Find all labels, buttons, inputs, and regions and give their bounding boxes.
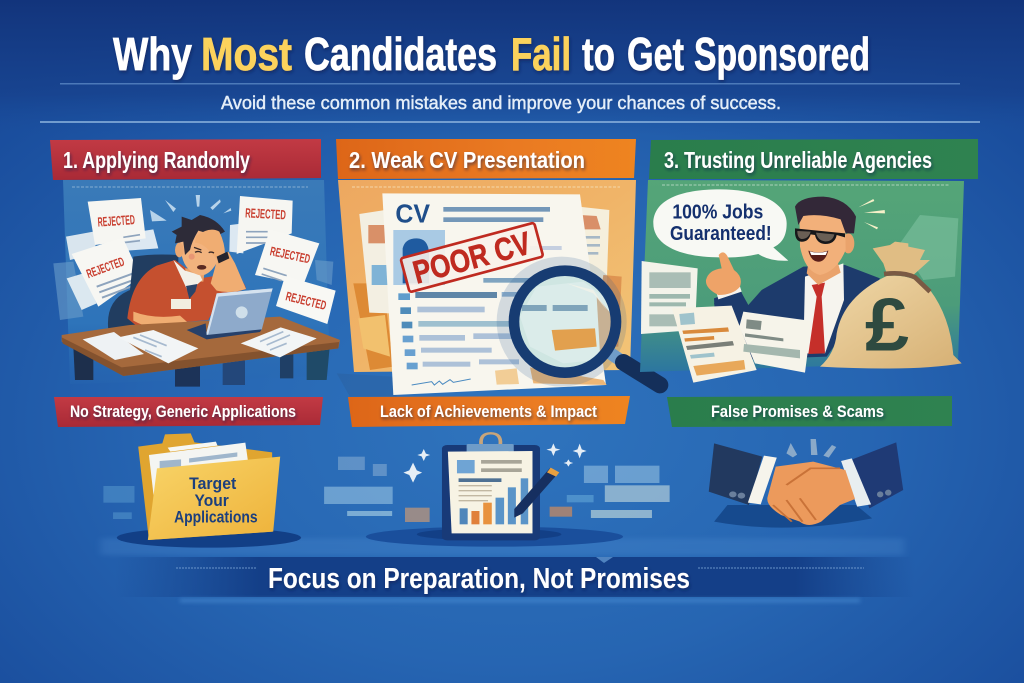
stress marks	[150, 195, 231, 221]
sweater	[127, 260, 246, 326]
desk	[62, 317, 340, 387]
neck	[185, 268, 205, 282]
sunglasses	[795, 228, 845, 244]
panel 3 caption: False Promises & Scams	[711, 402, 884, 421]
rays	[858, 199, 885, 229]
shirt	[803, 263, 844, 353]
middle paper	[672, 306, 757, 383]
sparkles	[403, 443, 587, 483]
panel 3 caption	[667, 396, 952, 427]
icon: clipboard with chart	[366, 433, 623, 547]
paper: rejected right	[255, 229, 319, 285]
laptop	[187, 288, 273, 339]
soft blocks	[103, 457, 670, 522]
title: Why	[113, 28, 192, 80]
panel 2 heading: 2. Weak CV Presentation	[349, 147, 585, 173]
ear	[842, 233, 854, 253]
folder label: Your	[194, 491, 229, 510]
cv sheet	[382, 193, 607, 395]
face	[799, 207, 846, 275]
folder label: Target	[189, 474, 237, 493]
closing banner	[115, 557, 915, 602]
hand on forehead	[195, 230, 225, 261]
paper: rejected top right: REJECTED	[245, 205, 286, 222]
raised arm	[211, 252, 246, 292]
magnifier	[497, 257, 660, 387]
paper: rejected top right	[237, 196, 293, 254]
hair	[795, 197, 856, 233]
illustration: stressed candidate with rejected papers	[53, 195, 340, 387]
panel 1 caption: No Strategy, Generic Applications	[70, 402, 296, 421]
smile	[808, 251, 828, 262]
title: Candidates	[304, 28, 497, 80]
paper: rejected top left: REJECTED	[97, 212, 136, 230]
candidate figure	[108, 215, 246, 333]
paper: rejected right: REJECTED	[269, 244, 311, 266]
icon: handshake	[709, 439, 903, 528]
money bag	[820, 242, 962, 369]
panel: weak cv presentation	[336, 139, 660, 427]
watch	[217, 252, 229, 263]
collar	[173, 260, 202, 292]
neck	[807, 258, 841, 285]
hair	[172, 215, 225, 255]
panel 3 heading: 3. Trusting Unreliable Agencies	[664, 147, 932, 173]
desk papers	[83, 327, 317, 363]
cv sheet: CV	[395, 199, 431, 229]
speech bubble: Guaranteed!	[670, 222, 772, 245]
title: Fail	[511, 28, 571, 80]
head	[180, 228, 220, 275]
folder label: Applications	[174, 508, 258, 526]
panel 1 caption	[54, 397, 323, 427]
panel 2 caption	[348, 396, 630, 427]
panel 2 caption: Lack of Achievements & Impact	[380, 402, 597, 421]
badge	[171, 299, 191, 309]
panel 1 heading	[50, 139, 321, 180]
panel 2 heading	[336, 139, 636, 179]
title: Most	[201, 28, 292, 80]
stamp: poor cv: POOR CV	[409, 225, 535, 291]
pointing hand	[706, 252, 749, 320]
paper: rejected top left	[88, 198, 146, 245]
paper: rejected left	[72, 237, 141, 307]
panel 2 backdrop	[338, 180, 636, 372]
chair	[108, 254, 178, 330]
title: Get	[627, 28, 684, 80]
speech bubble	[653, 189, 788, 261]
money bag: £	[865, 283, 909, 367]
paper: rejected left: REJECTED	[85, 255, 126, 281]
tie	[808, 283, 825, 354]
panel 3 backdrop	[640, 180, 964, 372]
panel 3 heading	[649, 139, 978, 179]
subtitle: Avoid these common mistakes and improve your chances of success.	[221, 92, 781, 113]
illustration: agent with money bag	[641, 189, 962, 383]
forearm	[133, 312, 192, 333]
paper: rejected lower right: REJECTED	[284, 289, 328, 313]
title: to	[582, 28, 615, 80]
title: Sponsored	[694, 28, 870, 80]
speech bubble: 100% Jobs	[672, 200, 763, 223]
bottom icons row	[101, 433, 904, 555]
panel: applying randomly	[50, 139, 340, 427]
panel: trusting unreliable agencies	[640, 139, 978, 427]
panel 1 backdrop	[63, 180, 330, 384]
suit	[714, 265, 880, 360]
icon: folder	[117, 433, 301, 548]
paper: rejected lower right	[276, 276, 336, 324]
title	[113, 28, 870, 80]
face details	[194, 247, 214, 253]
tie	[186, 284, 197, 299]
agent head group	[795, 197, 856, 354]
illustration: poor cv with magnifier	[337, 193, 660, 397]
left paper	[641, 261, 698, 334]
panel 1 heading: 1. Applying Randomly	[63, 147, 250, 173]
banner text: Focus on Preparation, Not Promises	[268, 563, 690, 595]
right paper	[739, 312, 812, 373]
